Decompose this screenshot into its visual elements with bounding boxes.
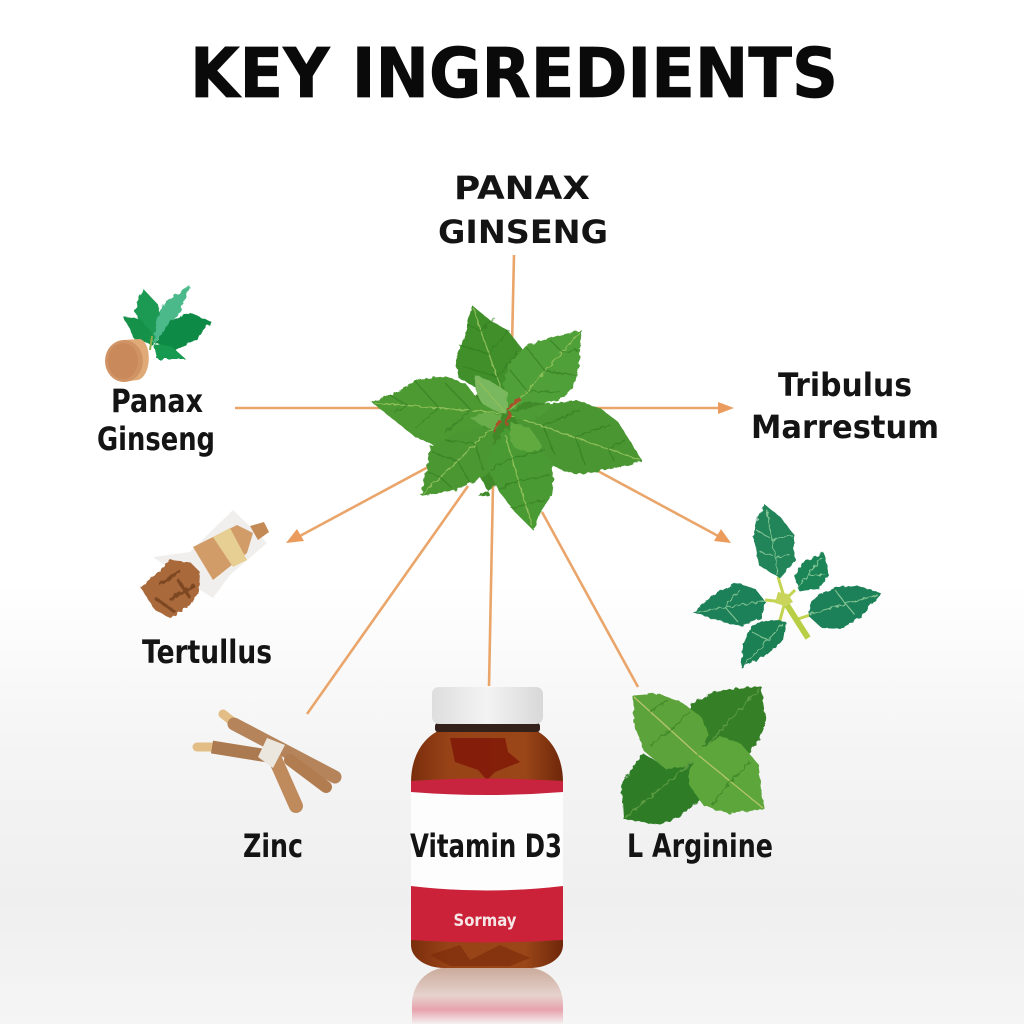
label: Zinc xyxy=(243,827,303,865)
bottle red band top xyxy=(411,778,563,797)
bottle cap xyxy=(432,687,543,724)
arrow: top connector xyxy=(512,255,514,345)
leaf: left xyxy=(375,378,503,443)
leaf: right xyxy=(510,402,640,473)
arrow: right to Tribulus xyxy=(595,402,734,414)
arrow: left connector xyxy=(235,407,385,409)
leaf: inner left xyxy=(470,412,503,430)
brand text: Sormay xyxy=(454,911,516,931)
item: L Arginine xyxy=(623,688,773,865)
icon: central ginseng leaves xyxy=(375,308,640,528)
bottle label white xyxy=(411,792,563,892)
label: Panax xyxy=(111,382,203,420)
neck ring xyxy=(435,723,540,732)
glass reflection patches xyxy=(450,738,520,780)
icon: bundled root sticks xyxy=(197,714,335,806)
item: Tertullus xyxy=(140,510,272,671)
label: Tribulus Marrestum: Marrestum xyxy=(751,408,939,446)
label: Ginseng xyxy=(97,420,215,458)
icon: wrapped root and chips xyxy=(140,510,269,618)
heading: Panax Ginseng centre: GINSENG xyxy=(438,213,608,251)
bottle base shadow patches xyxy=(430,945,530,966)
label: Tribulus Marrestum: Tribulus xyxy=(778,366,912,404)
title: KEY INGREDIENTS xyxy=(190,34,838,114)
label: Tertullus xyxy=(142,633,272,671)
leaf: inner lower right xyxy=(510,422,543,453)
arrow: to L Arginine xyxy=(542,512,638,687)
label: Tribulus Marrestum xyxy=(751,366,939,446)
icon: bottle reflection xyxy=(412,967,563,1024)
heading: Panax Ginseng centre: PANAX xyxy=(454,169,590,207)
label xyxy=(97,382,215,458)
icon: root slice and green leaves xyxy=(105,288,210,382)
icon: tribulus leaves xyxy=(695,506,880,666)
arrow: lower left to Tertullus xyxy=(286,466,430,543)
arrow: lower right to leaves xyxy=(596,470,731,543)
stem centre xyxy=(494,398,520,432)
leaf: inner right xyxy=(510,402,555,420)
arrow: to Zinc xyxy=(307,486,468,714)
heading: Panax Ginseng centre xyxy=(438,169,608,251)
icon: four green leaves xyxy=(623,688,765,823)
leaf: upper left xyxy=(457,308,521,400)
bottle red band bottom xyxy=(411,886,563,942)
label: L Arginine xyxy=(627,827,773,865)
item: bottle Vitamin D3 xyxy=(410,687,563,1024)
leaf: lower left xyxy=(423,428,492,494)
icon: bottle body xyxy=(411,730,563,968)
leaf: small pale xyxy=(475,376,507,413)
label: Vitamin D3 xyxy=(410,827,562,865)
arrow: to Vitamin D3 xyxy=(489,485,493,686)
leaf: upper right xyxy=(505,332,580,412)
item: Panax Ginseng left xyxy=(97,288,215,458)
leaf: bottom xyxy=(488,430,552,528)
item: Zinc xyxy=(197,714,335,865)
